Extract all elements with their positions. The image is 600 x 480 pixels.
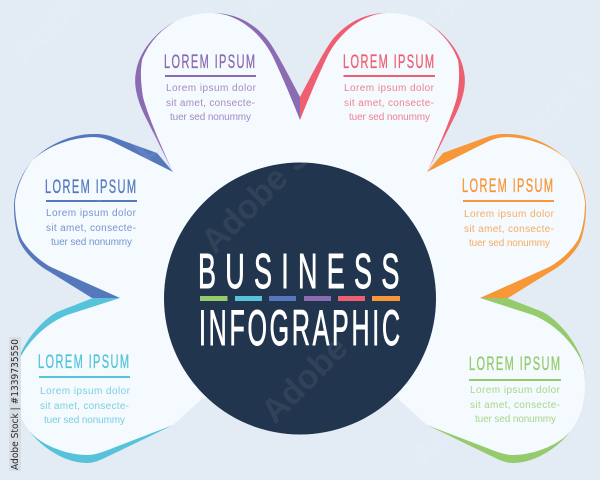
panel: blue petal xyxy=(14,134,173,298)
orange ribbon xyxy=(427,134,586,298)
purple ribbon xyxy=(135,13,300,172)
green body text: sit amet, consecte- xyxy=(470,400,560,411)
blue rule xyxy=(46,200,137,202)
watermarks: Adobe xyxy=(404,374,505,476)
panel: orange petal xyxy=(427,134,586,298)
red rule xyxy=(344,75,435,77)
green rule xyxy=(469,379,561,381)
blue body text: sit amet, consecte- xyxy=(46,223,136,234)
purple rule xyxy=(165,75,256,77)
red heading: LOREM IPSUM xyxy=(343,52,434,73)
orange body text xyxy=(464,209,555,249)
blue body text xyxy=(46,208,137,248)
green body text xyxy=(470,385,561,425)
cyan body text xyxy=(40,386,131,426)
purple body text xyxy=(166,83,257,123)
panel: green petal xyxy=(427,298,585,463)
title: INFOGRAPHIC: INFOGRAPHIC xyxy=(199,301,400,356)
blue heading: LOREM IPSUM xyxy=(45,177,136,198)
panel: purple petal xyxy=(135,13,300,172)
cyan rule xyxy=(39,376,130,378)
green body text: Lorem ipsum dolor xyxy=(470,385,561,396)
color bars xyxy=(200,296,400,301)
orange body text: Lorem ipsum dolor xyxy=(464,209,555,220)
cyan body text: Lorem ipsum dolor xyxy=(40,386,131,397)
watermarks: Adobe xyxy=(254,329,355,431)
red body text: Lorem ipsum dolor xyxy=(344,83,435,94)
panel: cyan petal xyxy=(15,298,173,463)
blue body text: tuer sed nonummy xyxy=(51,237,132,248)
title: BUSINESS: BUSINESS xyxy=(198,245,399,299)
purple body text: Lorem ipsum dolor xyxy=(166,83,257,94)
purple heading: LOREM IPSUM xyxy=(164,52,255,73)
cyan heading: LOREM IPSUM xyxy=(38,352,129,373)
purple body text: tuer sed nonummy xyxy=(170,112,251,123)
orange rule xyxy=(463,200,554,202)
panel: red petal xyxy=(300,13,465,172)
orange body text: sit amet, consecte- xyxy=(464,224,554,235)
red body text: sit amet, consecte- xyxy=(344,98,434,109)
vertical stock label: Adobe Stock | #1339735550 xyxy=(10,339,21,470)
watermarks: Adobe Stock xyxy=(194,87,368,261)
cyan body text: sit amet, consecte- xyxy=(40,401,129,412)
orange heading: LOREM IPSUM xyxy=(462,176,553,197)
blue body text: Lorem ipsum dolor xyxy=(46,208,137,219)
red body text xyxy=(344,83,435,123)
cyan body text: tuer sed nonummy xyxy=(44,415,125,426)
center circle xyxy=(164,162,436,434)
watermarks: Stock xyxy=(509,58,600,151)
green ribbon xyxy=(427,298,585,463)
blue ribbon xyxy=(14,134,173,298)
cyan ribbon xyxy=(15,298,173,463)
orange body text: tuer sed nonummy xyxy=(469,238,550,249)
green heading: LOREM IPSUM xyxy=(469,354,560,375)
watermarks: Adobe xyxy=(79,114,180,216)
green body text: tuer sed nonummy xyxy=(475,414,556,425)
purple body text: sit amet, consecte- xyxy=(166,98,255,109)
red ribbon xyxy=(300,13,465,172)
red body text: tuer sed nonummy xyxy=(349,112,430,123)
